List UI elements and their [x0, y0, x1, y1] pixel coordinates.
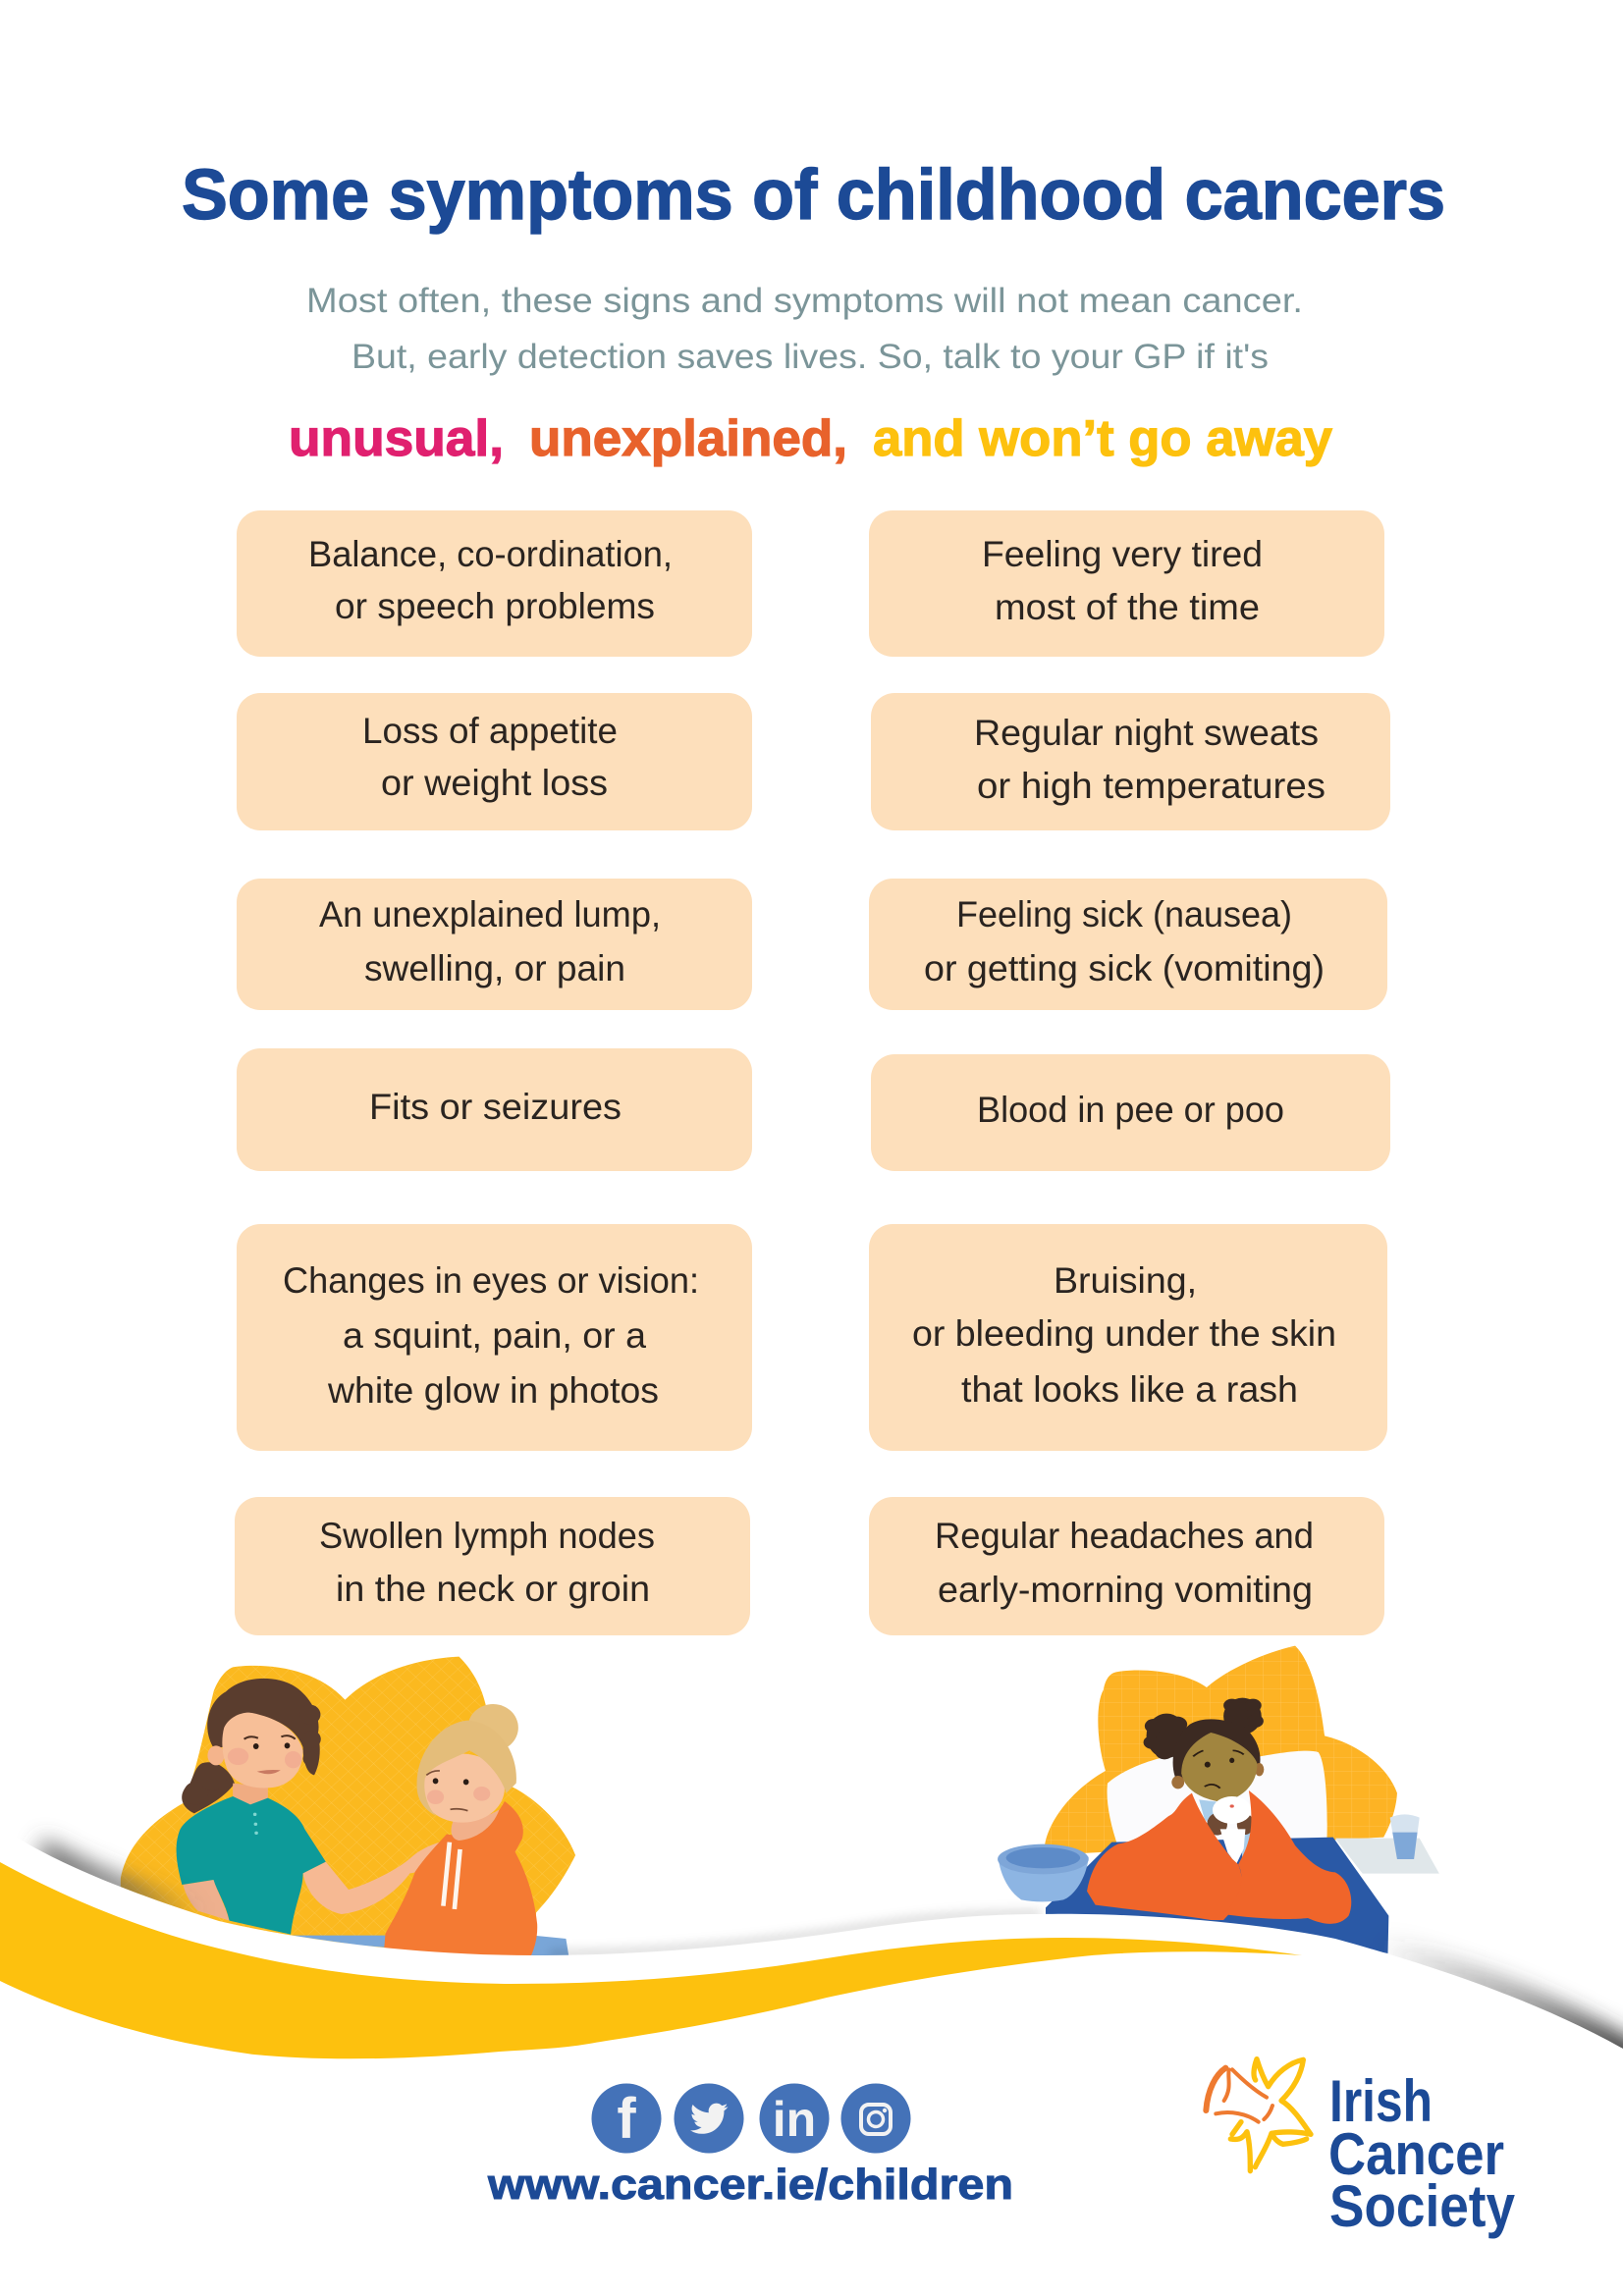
title: Some symptoms of childhood cancers: [182, 156, 1445, 235]
card: appetite: [237, 693, 752, 830]
icon: facebook: f: [617, 2087, 636, 2151]
pillow: [1108, 1751, 1327, 1852]
card: lymph nodes: Swollen lymph nodes: [319, 1516, 655, 1556]
card: eyes: Changes in eyes or vision:: [283, 1260, 699, 1301]
logo: Irish Cancer Society: Cancer: [1328, 2121, 1504, 2187]
coloured key message: and won’t go away: [873, 410, 1332, 467]
icon: twitter: [674, 2083, 744, 2154]
card: tired: most of the time: [995, 587, 1260, 627]
card: eyes: [237, 1224, 752, 1451]
white wave: [0, 1826, 1623, 2296]
card: headaches: Regular headaches and: [935, 1516, 1314, 1556]
icon: linkedin: in: [773, 2092, 816, 2147]
card: nausea: [869, 879, 1387, 1010]
card: night sweats: Regular night sweats: [974, 713, 1319, 753]
intro text: Most often, these signs and symptoms will not mean cancer.: [306, 282, 1303, 320]
card: lymph nodes: in the neck or groin: [336, 1569, 650, 1609]
card: tired: [869, 510, 1384, 657]
child: [1087, 1698, 1351, 1924]
card: appetite: or weight loss: [381, 763, 608, 803]
card: nausea: or getting sick (vomiting): [924, 948, 1325, 988]
card: fits: [237, 1048, 752, 1171]
social icons: [591, 2083, 911, 2154]
logo: Irish Cancer Society: Society: [1329, 2173, 1516, 2239]
card: tired: Feeling very tired: [982, 534, 1263, 574]
flower background: [121, 1657, 575, 1956]
card: night sweats: or high temperatures: [977, 766, 1325, 806]
icon: daffodil: [1206, 2059, 1311, 2171]
card: lump: An unexplained lump,: [319, 894, 661, 934]
card: lump: [237, 879, 752, 1010]
card: lump: swelling, or pain: [364, 948, 625, 988]
basin: [998, 1844, 1089, 1901]
illustration: sick child in bed: [998, 1646, 1439, 1953]
coloured key message: unusual,: [289, 410, 504, 467]
card: balance: [237, 510, 752, 657]
card: bruising: Bruising,: [1054, 1260, 1197, 1301]
coloured key message: [289, 410, 1332, 467]
yellow wave: [0, 1862, 1302, 2058]
card: balance: or speech problems: [335, 586, 655, 626]
icon: instagram: [840, 2083, 911, 2154]
website url: www.cancer.ie/children: [487, 2161, 1013, 2209]
card: balance: Balance, co-ordination,: [308, 534, 673, 574]
icon: facebook: [591, 2083, 662, 2154]
card: headaches: early-morning vomiting: [938, 1570, 1313, 1610]
girl in hoodie: [291, 1704, 568, 1956]
card: nausea: Feeling sick (nausea): [956, 894, 1292, 934]
card: blood: Blood in pee or poo: [977, 1090, 1284, 1130]
card: lymph nodes: [235, 1497, 750, 1635]
intro text: But, early detection saves lives. So, talk to your GP if it's: [352, 338, 1269, 376]
card: headaches: [869, 1497, 1384, 1635]
card: appetite: Loss of appetite: [362, 711, 618, 751]
illustration: woman comforting girl: [121, 1657, 575, 1956]
table mat and glass: [1335, 1814, 1439, 1874]
intro text: [306, 282, 1303, 376]
card: bruising: that looks like a rash: [961, 1369, 1298, 1410]
card: fits: Fits or seizures: [369, 1087, 622, 1127]
card: blood: [871, 1054, 1390, 1171]
faint middle shadow: [550, 1914, 1041, 1954]
flower background: [1045, 1646, 1397, 1855]
bed: [1046, 1838, 1388, 1953]
icon: linkedin: [760, 2083, 829, 2154]
wave shadows: [35, 1849, 1623, 2061]
coloured key message: unexplained,: [529, 410, 847, 467]
card: night sweats: [871, 693, 1390, 830]
logo: Irish Cancer Society: Irish: [1329, 2068, 1433, 2134]
card: eyes: white glow in photos: [327, 1370, 659, 1411]
card: bruising: [869, 1224, 1387, 1451]
card: eyes: a squint, pain, or a: [343, 1315, 646, 1356]
woman: [177, 1679, 440, 1935]
logo: Irish Cancer Society: [1206, 2059, 1516, 2239]
card: bruising: or bleeding under the skin: [912, 1313, 1336, 1354]
